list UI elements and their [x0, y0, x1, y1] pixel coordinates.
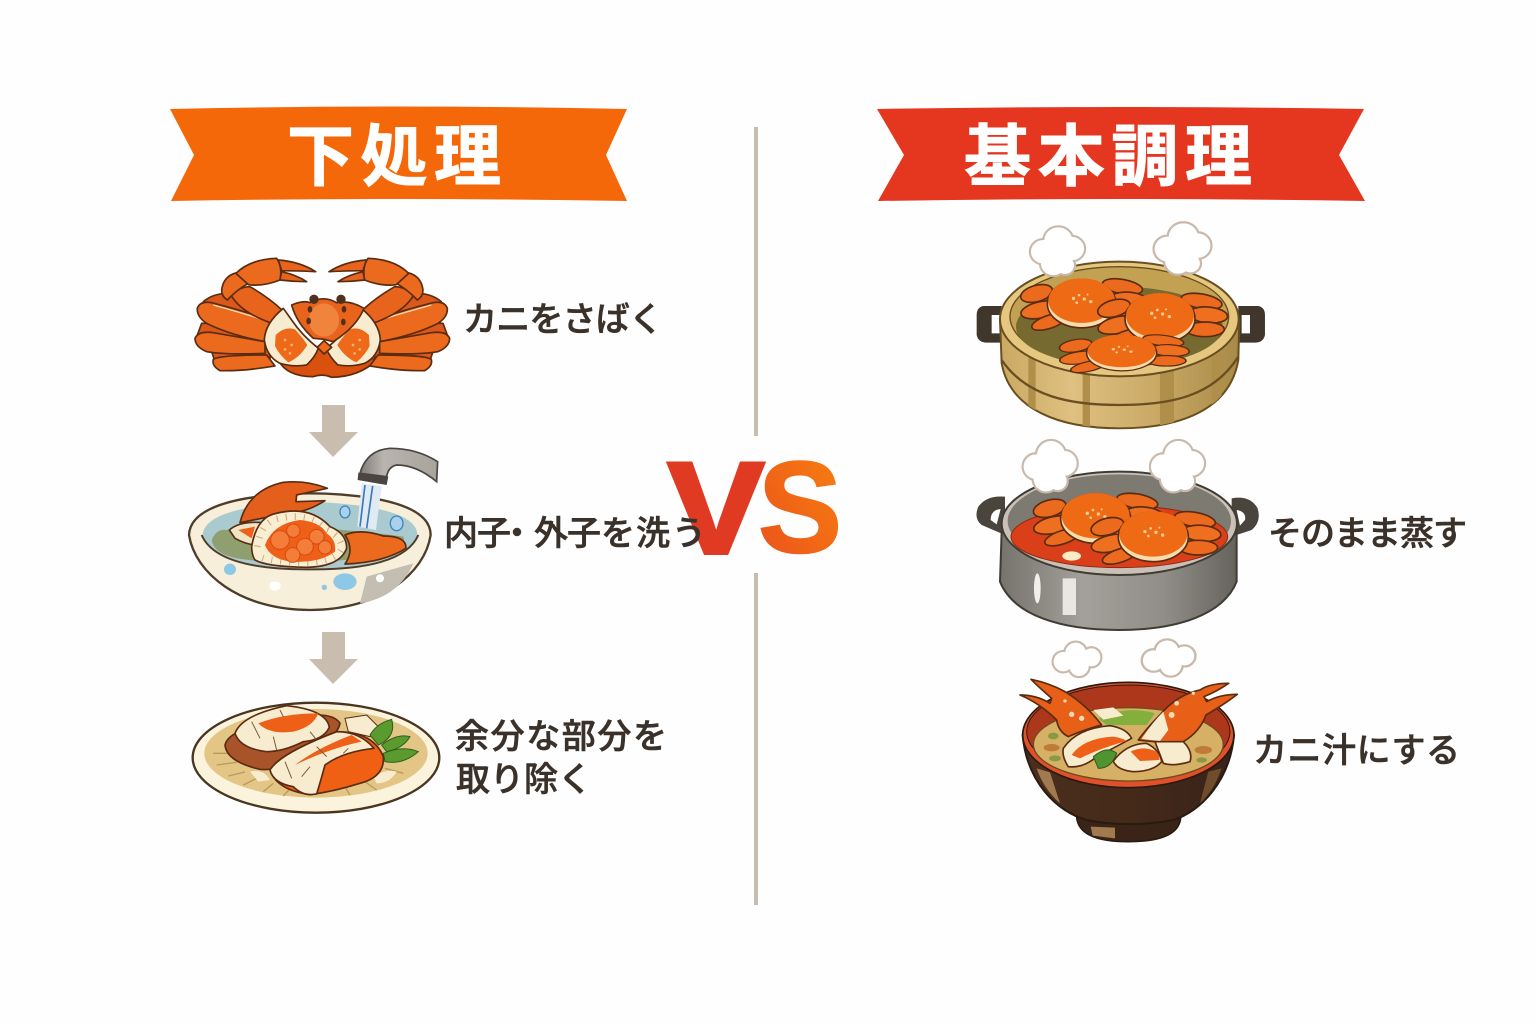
sub-element: steam	[1023, 440, 1205, 492]
icon: bowl of crab soup	[1020, 639, 1237, 842]
sub-element: crabs	[1019, 276, 1228, 375]
icon: whole crab	[195, 258, 450, 377]
VS mark	[668, 434, 842, 581]
sub-element: front crab meat	[270, 732, 383, 795]
sub-element: water stream	[357, 483, 382, 530]
heading: 基本調理: 基本調理	[964, 120, 1252, 195]
label: 余分な部分を 取り除く: 取り除く	[456, 761, 592, 799]
sub-element: roe shell	[252, 511, 347, 567]
label: 余分な部分を 取り除く	[455, 718, 667, 799]
icon: bowl with faucet	[189, 448, 438, 610]
sub-element: steam	[1030, 222, 1211, 276]
arrow: step 1 to 2	[309, 405, 358, 457]
panel: left heading banner 下処理	[170, 106, 627, 201]
label: カニをさばく: カニをさばく	[463, 301, 663, 339]
arrow: step 2 to 3	[309, 632, 358, 684]
center divider	[754, 127, 758, 905]
heading: 下処理: 下処理	[287, 120, 501, 195]
sub-element: meat	[1063, 726, 1191, 772]
sub-element: claws	[1020, 679, 1237, 742]
sub-element: leaves	[370, 719, 418, 762]
icon: wooden steamer	[977, 222, 1265, 430]
sub-element: faucet	[358, 448, 438, 485]
label: カニ汁にする: カニ汁にする	[1253, 732, 1460, 770]
panel: right heading banner 基本調理	[877, 107, 1365, 201]
VS mark: S	[758, 434, 842, 580]
VS mark: V	[668, 435, 764, 581]
sub-element: handles	[976, 496, 1259, 537]
sub-element: steam	[1053, 639, 1195, 677]
icon: steel pot	[976, 440, 1259, 630]
sub-element: crabs	[1031, 491, 1222, 568]
label: 内子・外子を洗う: 内子・外子を洗う	[444, 515, 706, 553]
icon: plate of cleaned crab	[193, 703, 439, 813]
sub-element: handles	[977, 306, 1265, 343]
sub-element: claw	[240, 482, 327, 523]
label: 余分な部分を 取り除く: 余分な部分を	[455, 718, 667, 756]
label: そのまま蒸す: そのまま蒸す	[1268, 515, 1467, 553]
